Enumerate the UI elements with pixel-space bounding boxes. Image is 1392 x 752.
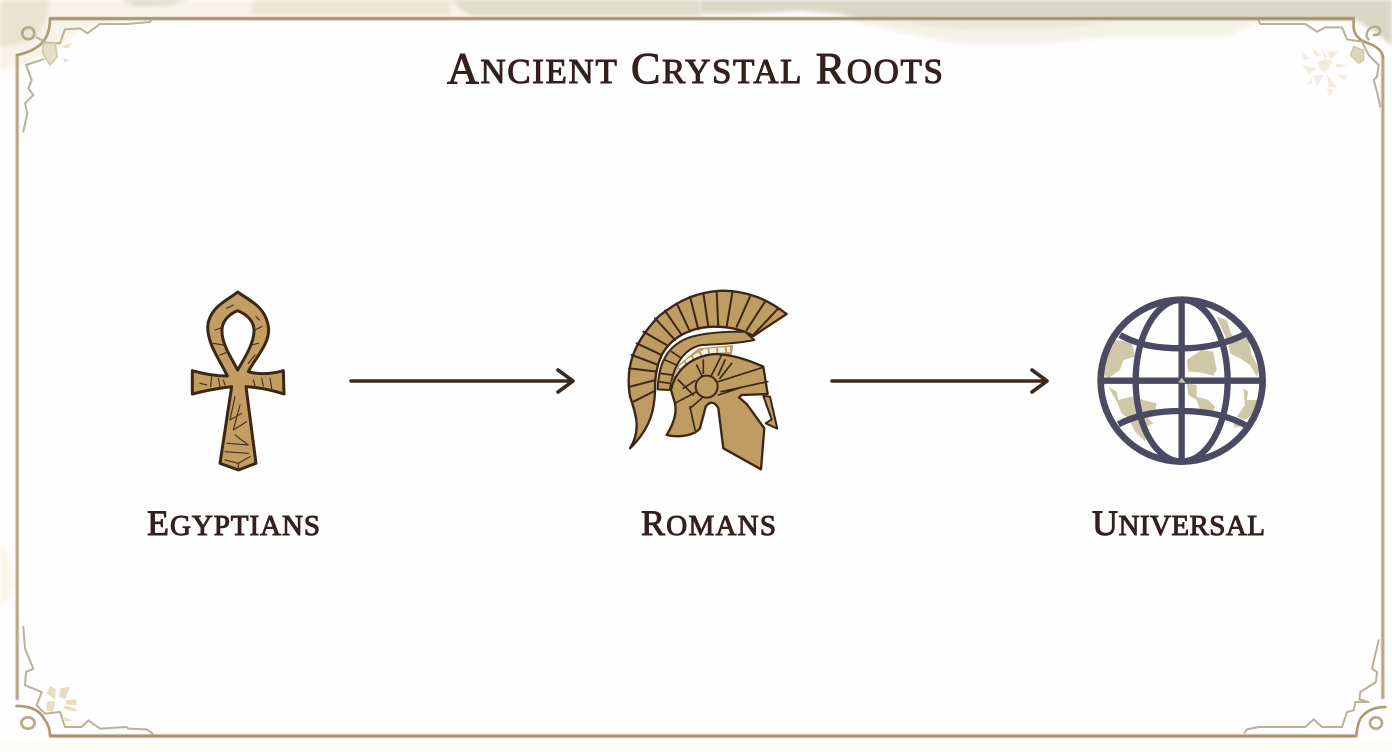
title: ANCIENT CRYSTAL ROOTS [447,44,943,93]
corner ornament: bottom right [1245,640,1385,736]
arrow: Egyptians to Romans [351,370,573,392]
globe landmasses [1104,317,1260,442]
icon: globe [1101,300,1263,462]
corner ornament: top left [17,18,152,132]
label: Romans: ROMANS [641,503,776,543]
helmet dome and cheek guard [667,354,768,469]
corner ornament: top right [1259,19,1383,107]
helmet crest [629,291,787,448]
icon: Roman helmet [629,291,787,469]
arrow: Romans to Universal [832,370,1047,392]
label: Egyptians: EGYPTIANS [147,503,320,543]
helmet inner band [658,332,754,390]
helmet details [675,355,777,430]
decorative flower: top right [1302,47,1348,97]
decorative flower: bottom left [47,686,77,721]
corner ornament: bottom left [17,627,153,736]
label: Universal: UNIVERSAL [1092,503,1265,543]
icon: ankh [192,292,284,470]
